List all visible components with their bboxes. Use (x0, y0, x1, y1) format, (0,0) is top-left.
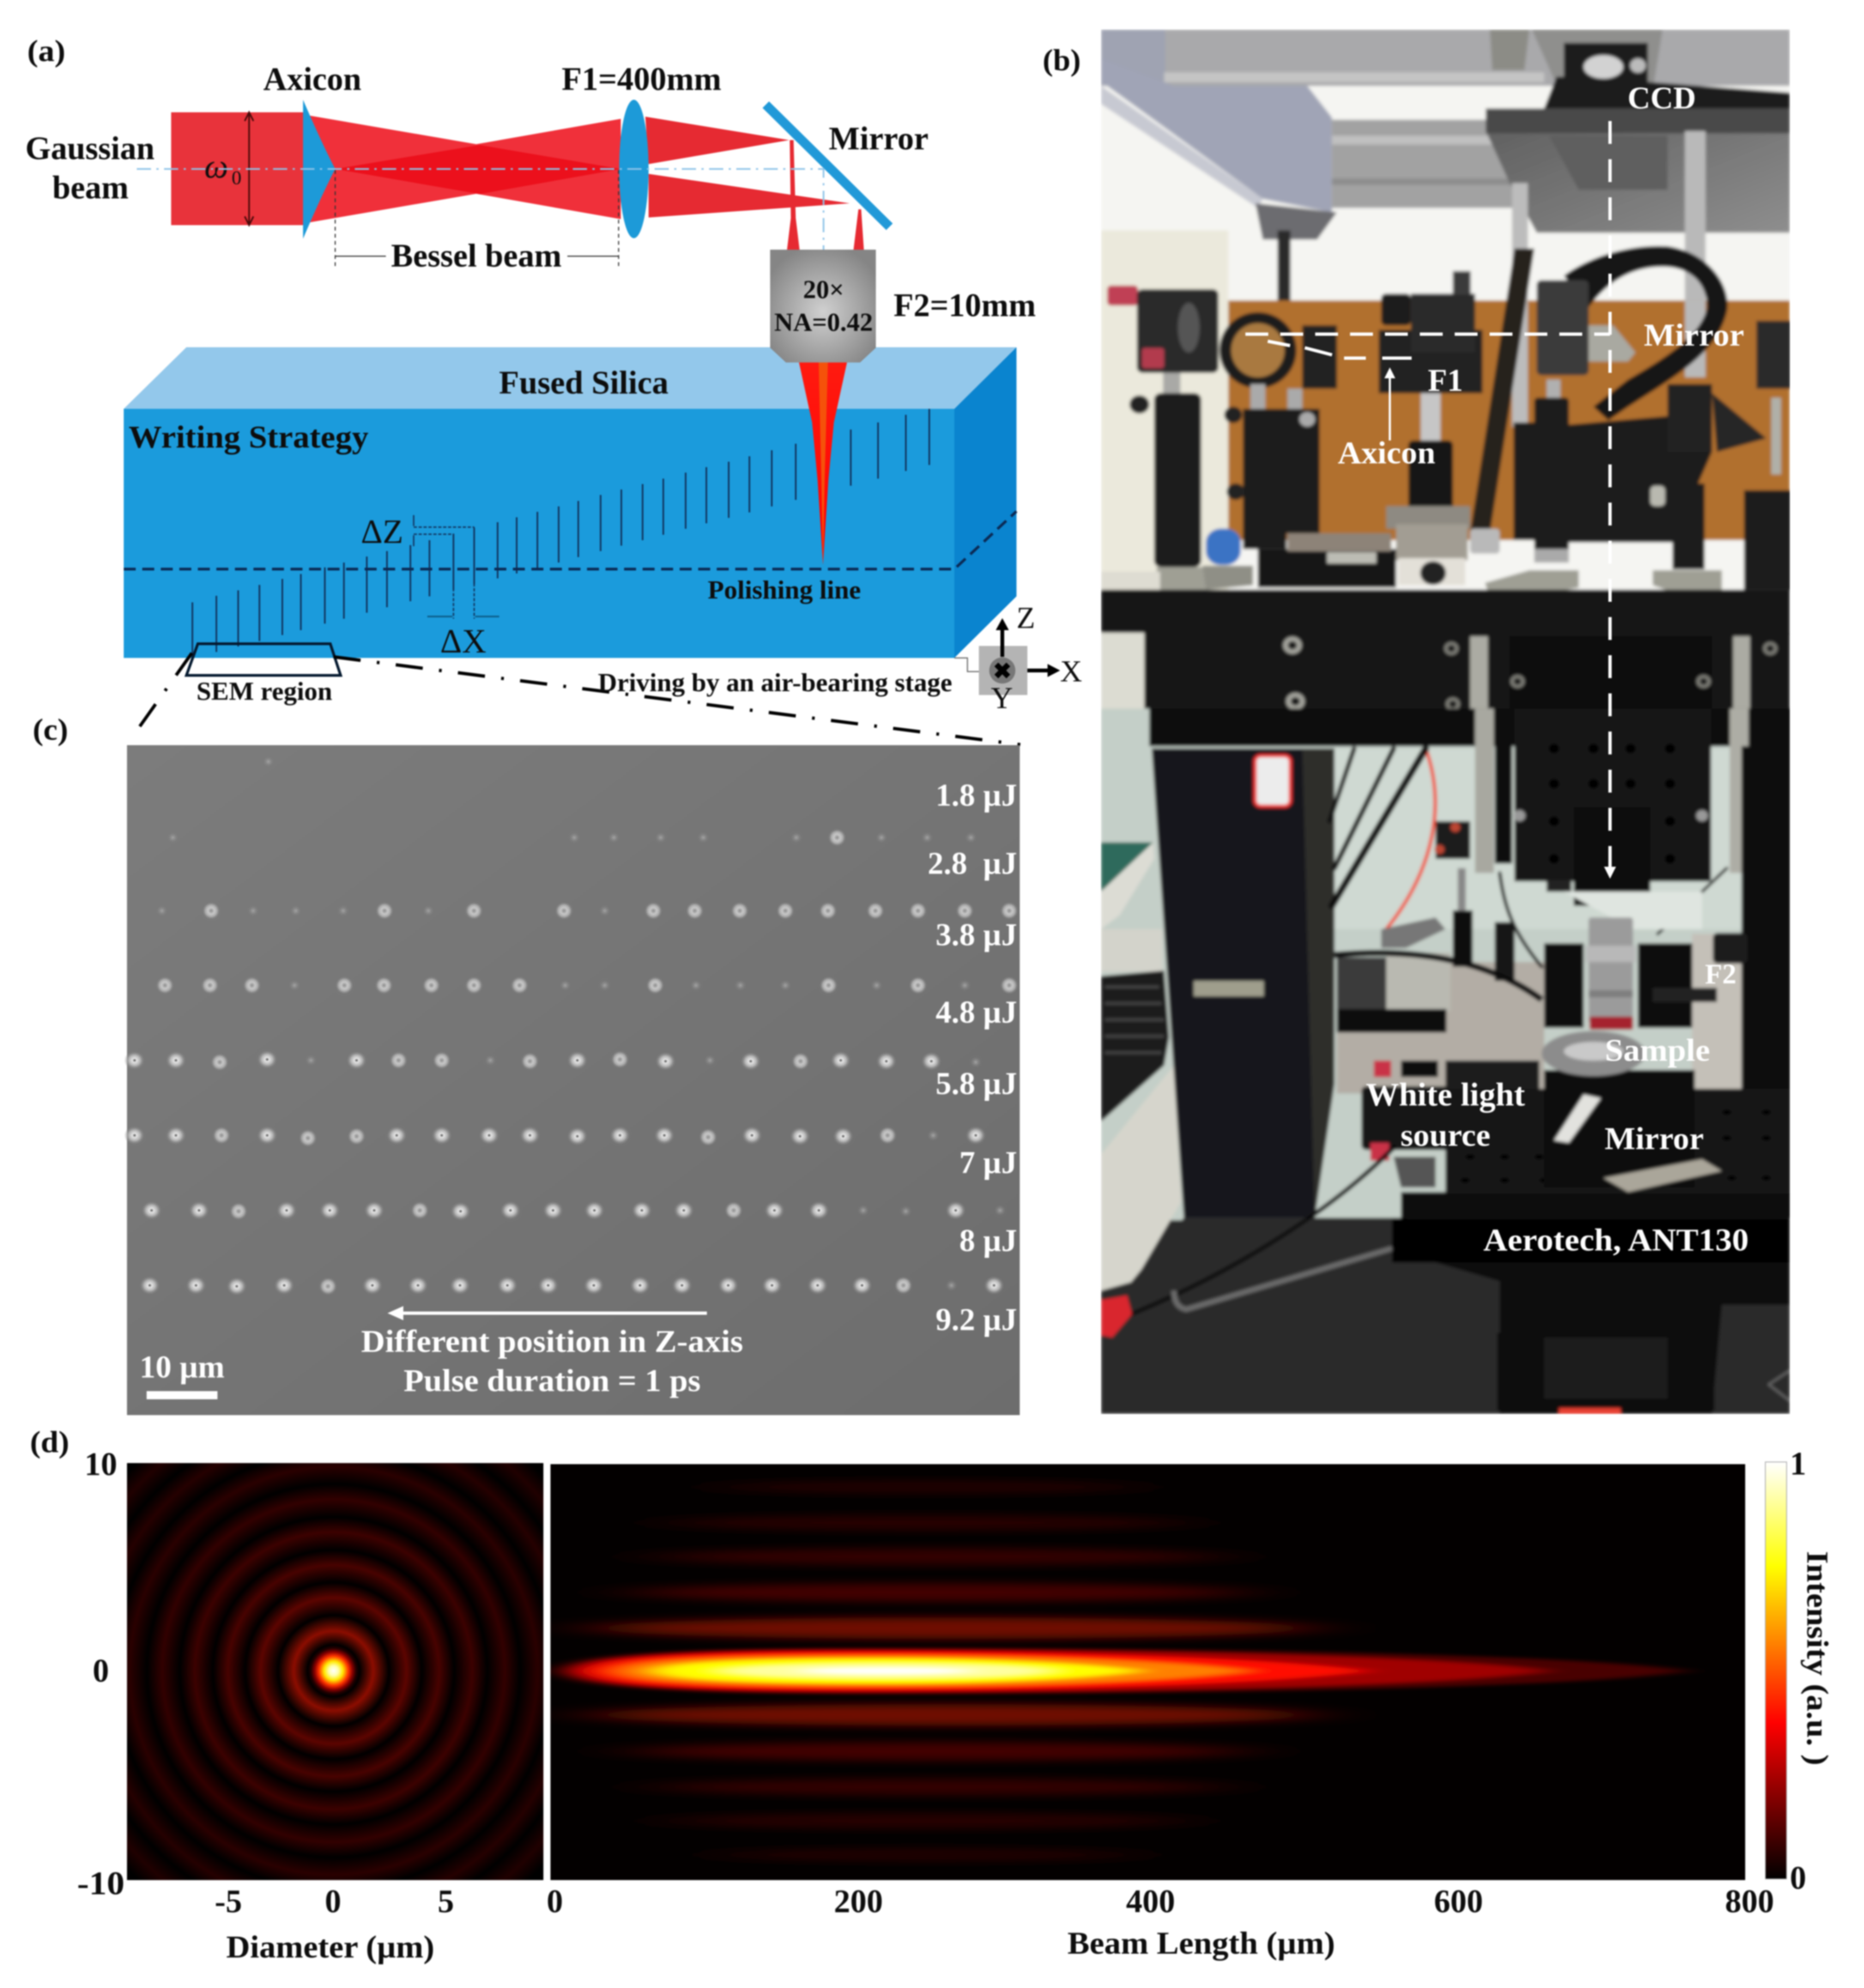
panel: (d) simulated Bessel beam intensity (77, 1446, 1834, 1965)
polishing line (124, 511, 1016, 569)
photo lower part: stage, sample and enclosure (1101, 709, 1791, 1415)
stage axes icon (954, 601, 1082, 715)
zoom guide lines to SEM panel (132, 653, 1020, 745)
label: Fused Silica: Fused Silica (499, 365, 668, 401)
label: Gaussian beam: beam (52, 170, 129, 206)
pulse energy labels: 3.8 µJ (936, 917, 1017, 952)
SEM region trapezoid (186, 644, 341, 675)
refocused beams after F1 lens (645, 117, 864, 250)
pulse energy labels: 1.8 µJ (936, 777, 1017, 813)
x axis tick labels left: 5 (438, 1883, 454, 1919)
SEM caption: Different position in Z-axis (361, 1324, 743, 1359)
beam waist arrow and omega symbol (204, 112, 253, 225)
stage axes icon: X (1060, 655, 1082, 688)
pulse energy labels: 5.8 µJ (936, 1066, 1017, 1101)
beam waist arrow and omega symbol: 0 (232, 167, 241, 189)
pulse energy labels (928, 777, 1017, 1337)
colorbar tick labels (1790, 1446, 1806, 1896)
x axis title: Diameter: Diameter (µm) (226, 1929, 434, 1965)
fused silica block (124, 347, 1016, 658)
photo annotations: Mirror (1644, 317, 1744, 353)
photograph shapes softened (1101, 29, 1791, 1415)
label: F2=10mm: F2=10mm (894, 287, 1036, 323)
stage axes icon: Z (1016, 601, 1035, 635)
label: Bessel beam: Bessel beam (391, 238, 561, 274)
colorbar title: Intensity (a.u.): Intensity (a.u. ) (1800, 1551, 1834, 1765)
photo annotations: White light (1366, 1077, 1525, 1113)
photo annotations: source (1401, 1117, 1490, 1153)
objective lens (770, 250, 876, 362)
scale bar 10 µm (140, 1349, 225, 1399)
pulse energy labels: 7 µJ (959, 1145, 1017, 1180)
panel label (a): (a) (27, 34, 65, 68)
scale bar 10 µm: 10 µm (140, 1349, 225, 1385)
pulse energy labels: 2.8 µJ (928, 845, 1017, 881)
beam waist arrow and omega symbol: ω (204, 148, 228, 185)
photo annotations (1338, 80, 1748, 1258)
delta X annotation (427, 583, 499, 660)
label: SEM region: SEM region (196, 677, 332, 706)
cross-section heatmap (127, 1463, 543, 1880)
x axis tick labels left: -5 (215, 1883, 242, 1919)
colorbar tick labels: 0 (1790, 1860, 1806, 1896)
pulse energy labels: 4.8 µJ (936, 994, 1017, 1030)
label: Polishing line: Polishing line (707, 576, 861, 605)
y axis tick labels: -10 (77, 1865, 124, 1901)
objective lens: NA=0.42 (774, 308, 873, 337)
y axis tick labels: 10 (84, 1446, 117, 1482)
SEM caption: Pulse duration = 1 ps (403, 1363, 701, 1398)
SEM damage spots (124, 756, 1018, 1296)
label: Mirror: Mirror (828, 120, 929, 156)
stage axes icon: Y (991, 681, 1013, 715)
gaussian input beam (171, 112, 306, 225)
label: Driving by an air-bearing stage: Driving by an air-bearing stage (598, 668, 952, 697)
lens F1 (619, 100, 649, 238)
photo annotations: Axicon (1338, 435, 1436, 470)
photo annotations: F1 (1428, 362, 1463, 398)
photo annotations: CCD (1627, 80, 1696, 116)
x axis tick labels right: 400 (1126, 1883, 1175, 1919)
panel label (d): (d) (30, 1425, 69, 1459)
written bessel tracks (192, 409, 929, 658)
photo upper part: optics on breadboard (1101, 29, 1791, 710)
mirror (766, 105, 889, 227)
focused bessel beam in sample (799, 362, 847, 565)
pulse energy labels: 9.2 µJ (936, 1302, 1017, 1337)
pulse energy labels: 8 µJ (959, 1223, 1017, 1258)
colorbar tick labels: 1 (1790, 1446, 1806, 1482)
SEM background (127, 745, 1020, 1415)
optical axis (137, 169, 824, 250)
longitudinal heatmap (550, 1464, 1745, 1880)
delta Z annotation: ΔZ (361, 513, 403, 551)
beam path: white dashed lines and arrows (1245, 121, 1610, 867)
x axis tick labels right: 200 (834, 1883, 883, 1919)
label: Writing Strategy: Writing Strategy (129, 419, 368, 455)
panel: (c) SEM image with pulse energy rows (124, 745, 1020, 1415)
label: F1=400mm: F1=400mm (561, 61, 722, 97)
x axis tick labels right: 800 (1725, 1883, 1774, 1919)
panel: (a) optical path and writing strategy schematic (25, 34, 1082, 745)
axicon (303, 100, 335, 239)
photo annotations: Sample (1605, 1032, 1710, 1068)
panel label (b): (b) (1043, 44, 1081, 77)
panel: (b) photograph of experimental setup (1101, 29, 1791, 1415)
bessel beam interference bands (303, 114, 621, 223)
label: Axicon: Axicon (263, 61, 361, 97)
x axis tick labels left (215, 1883, 454, 1919)
x axis tick labels right: 0 (547, 1883, 563, 1919)
photo annotations: Mirror (1605, 1121, 1704, 1156)
x axis tick labels right: 600 (1434, 1883, 1483, 1919)
x axis tick labels right (547, 1883, 1774, 1919)
panel label (c): (c) (33, 713, 68, 747)
photo annotations: Aerotech, ANT130 (1484, 1222, 1748, 1258)
label: Gaussian beam: Gaussian (25, 130, 155, 166)
x axis title: Beam Length: Beam Length (µm) (1067, 1925, 1335, 1961)
x axis tick labels left: 0 (325, 1883, 341, 1919)
SEM caption (361, 1324, 743, 1398)
label: Gaussian beam (25, 130, 155, 206)
photo annotations: F2 (1705, 959, 1736, 990)
direction arrow (388, 1306, 707, 1320)
objective lens: 20× (803, 275, 844, 304)
bessel beam length guide (335, 170, 619, 267)
y axis tick labels (77, 1446, 124, 1901)
colorbar (1765, 1462, 1787, 1879)
y axis tick labels: 0 (93, 1653, 109, 1689)
delta Z annotation (361, 513, 474, 551)
white arrowheads (1384, 367, 1616, 879)
delta X annotation: ΔX (440, 623, 486, 660)
